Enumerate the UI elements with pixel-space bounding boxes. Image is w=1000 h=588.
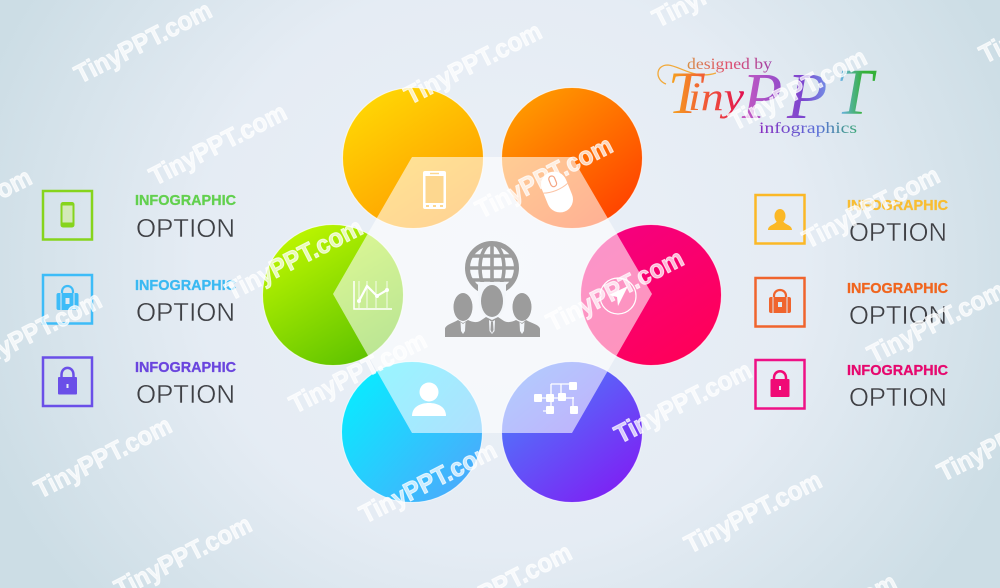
logo flourish [658, 65, 716, 84]
Tiny: T [668, 60, 705, 126]
label: INFOGRAPHIC [847, 280, 948, 297]
globe [468, 244, 516, 292]
right option 2 [756, 278, 948, 330]
watermarks: TinyPPT.com [470, 130, 618, 224]
watermarks: TinyPPT.com [284, 325, 432, 419]
infographics: infographics [759, 120, 857, 137]
label: INFOGRAPHIC [847, 362, 948, 379]
icon box: briefcase [756, 278, 804, 326]
label: INFOGRAPHIC [135, 277, 236, 294]
circle: violet [502, 362, 642, 502]
icon: compass in pink circle [600, 278, 636, 314]
icon box: briefcase [43, 275, 92, 324]
right option 1 [756, 195, 948, 247]
circle: green [262, 224, 404, 366]
Tiny: iny [688, 74, 744, 119]
circle: yellow [342, 88, 484, 228]
designed by: designed by [687, 56, 772, 73]
icon box: padlock [43, 358, 92, 406]
icon: phone in yellow circle [423, 171, 446, 209]
watermarks: TinyPPT.com [29, 410, 177, 504]
label: INFOGRAPHIC [847, 197, 948, 214]
people [445, 282, 540, 337]
watermarks: TinyPPT.com [220, 212, 368, 306]
icon box: user [756, 195, 804, 244]
circle: pink [580, 224, 722, 366]
label: OPTION [136, 381, 235, 409]
icon: flowchart in violet circle [534, 382, 578, 414]
circle: cyan [342, 362, 482, 502]
icon: centre globe and people [445, 244, 540, 337]
right option 3 [756, 360, 948, 412]
label: INFOGRAPHIC [135, 192, 236, 209]
watermarks: TinyPPT.com [541, 243, 689, 337]
label: OPTION [849, 384, 947, 412]
icon: person in cyan circle [412, 382, 446, 416]
PPT: P [741, 60, 782, 133]
watermarks: TinyPPT.com [724, 42, 872, 136]
label: OPTION [136, 215, 235, 243]
PPT: P [786, 60, 827, 133]
watermarks: TinyPPT.com [399, 16, 547, 110]
logo: designed by TinyPPT infographics [658, 56, 877, 137]
icon box: phone [43, 191, 92, 240]
left option 1 [43, 191, 236, 243]
central hexagon overlay [333, 157, 652, 433]
label: OPTION [849, 219, 947, 247]
watermarks: TinyPPT.com [144, 97, 292, 191]
left option 2 [43, 275, 236, 327]
icon box: padlock [756, 360, 804, 408]
watermarks: TinyPPT.com [354, 435, 502, 529]
label: INFOGRAPHIC [135, 359, 236, 376]
label: OPTION [849, 302, 947, 330]
icon: line chart in green circle [354, 281, 392, 309]
icon: mouse in orange circle [537, 168, 577, 216]
left option 3 [43, 358, 236, 409]
circle: orange [502, 88, 642, 228]
label: OPTION [136, 299, 235, 327]
watermarks: TinyPPT.com [797, 160, 945, 254]
watermarks: TinyPPT.com [609, 355, 757, 449]
watermarks: TinyPPT.com [679, 465, 827, 559]
PPT: T [836, 56, 877, 129]
